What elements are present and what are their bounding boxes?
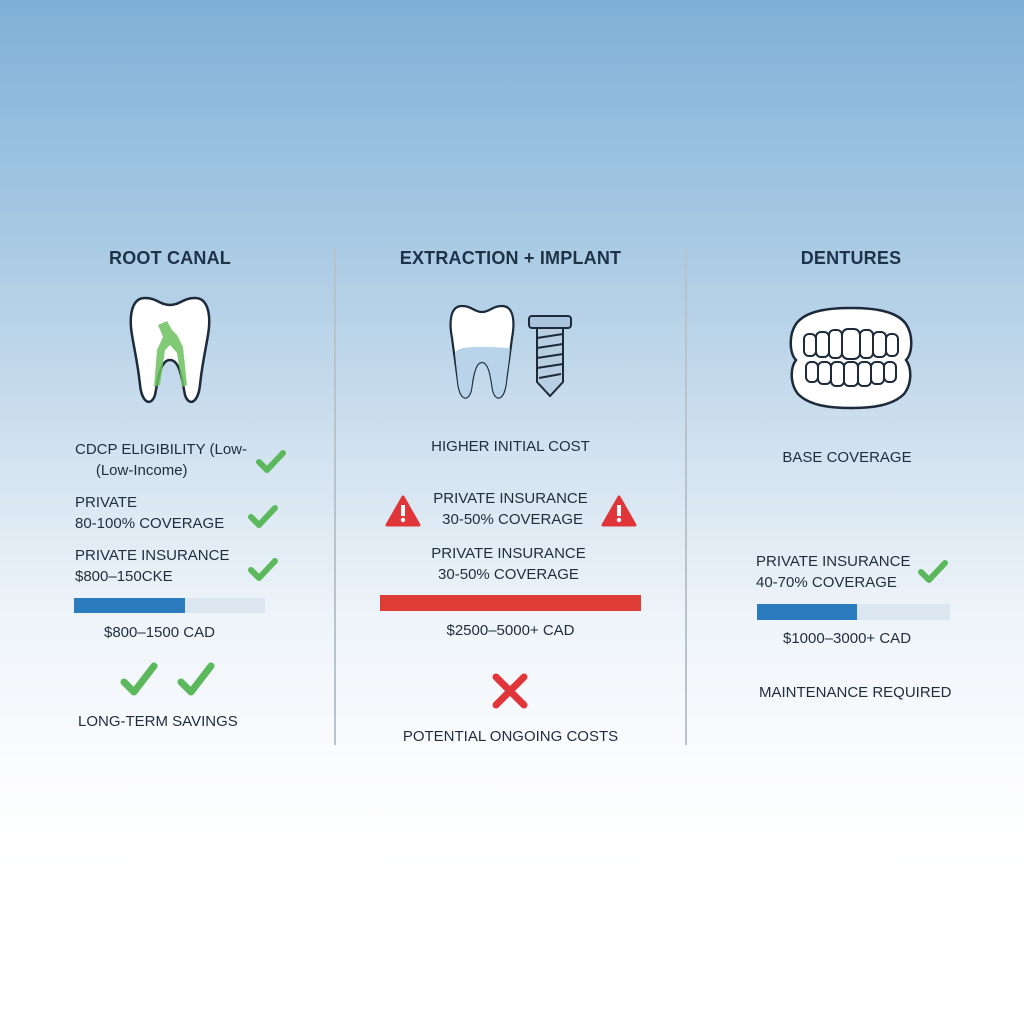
icon: x — [492, 674, 528, 708]
icon: tooth and implant — [449, 304, 572, 399]
text: private insurance 2 — [431, 545, 586, 583]
text: cdcp: CDCP ELIGIBILITY (Low- — [75, 441, 247, 458]
heading: dentures: DENTURES — [801, 248, 901, 268]
bar: cost red — [380, 595, 641, 611]
text: cost: $1000–3000+ CAD — [783, 630, 911, 647]
text: cdcp — [75, 441, 247, 479]
text: private insurance: $800–150CKE — [75, 568, 173, 585]
text: private insurance — [756, 553, 910, 591]
text: private coverage: 80-100% COVERAGE — [75, 515, 224, 532]
icon: warning left — [386, 495, 421, 526]
heading: root canal: ROOT CANAL — [109, 248, 231, 268]
icon: check — [256, 450, 286, 473]
text: ongoing costs: POTENTIAL ONGOING COSTS — [403, 728, 618, 745]
icon: check — [248, 558, 278, 581]
icon: double check — [120, 662, 214, 696]
icon: dentures — [789, 306, 913, 410]
text: higher initial cost: HIGHER INITIAL COST — [431, 438, 590, 455]
text: private insurance 1: 30-50% COVERAGE — [442, 511, 583, 528]
text: private insurance: 40-70% COVERAGE — [756, 574, 897, 591]
text: private insurance 1: PRIVATE INSURANCE — [433, 490, 588, 507]
text: cost: $800–1500 CAD — [104, 624, 215, 641]
text: private insurance: PRIVATE INSURANCE — [756, 553, 910, 570]
icon: tooth with canal — [130, 296, 210, 404]
text: private insurance 2: PRIVATE INSURANCE — [431, 545, 586, 562]
panel: root canal — [74, 248, 286, 730]
text: private coverage — [75, 494, 224, 532]
text: private insurance — [75, 547, 229, 585]
text: private insurance: PRIVATE INSURANCE — [75, 547, 229, 564]
icon: warning right — [602, 495, 637, 526]
panel: dentures — [756, 248, 952, 701]
text: base coverage: BASE COVERAGE — [782, 449, 912, 466]
icon: check — [918, 560, 948, 583]
text: cost: $2500–5000+ CAD — [446, 622, 575, 639]
bar: cost — [757, 604, 950, 620]
text: private insurance 2: 30-50% COVERAGE — [438, 566, 579, 583]
text: maintenance: MAINTENANCE REQUIRED — [759, 684, 952, 701]
panel: extraction + implant — [380, 248, 641, 745]
text: cdcp: (Low-Income) — [96, 462, 188, 479]
text: private insurance 1 — [433, 490, 588, 528]
bar: cost — [74, 598, 265, 613]
text: private coverage: PRIVATE — [75, 494, 137, 511]
text: savings: LONG-TERM SAVINGS — [78, 713, 238, 730]
icon: check — [248, 505, 278, 528]
heading: extraction + implant: EXTRACTION + IMPLANT — [400, 248, 621, 268]
